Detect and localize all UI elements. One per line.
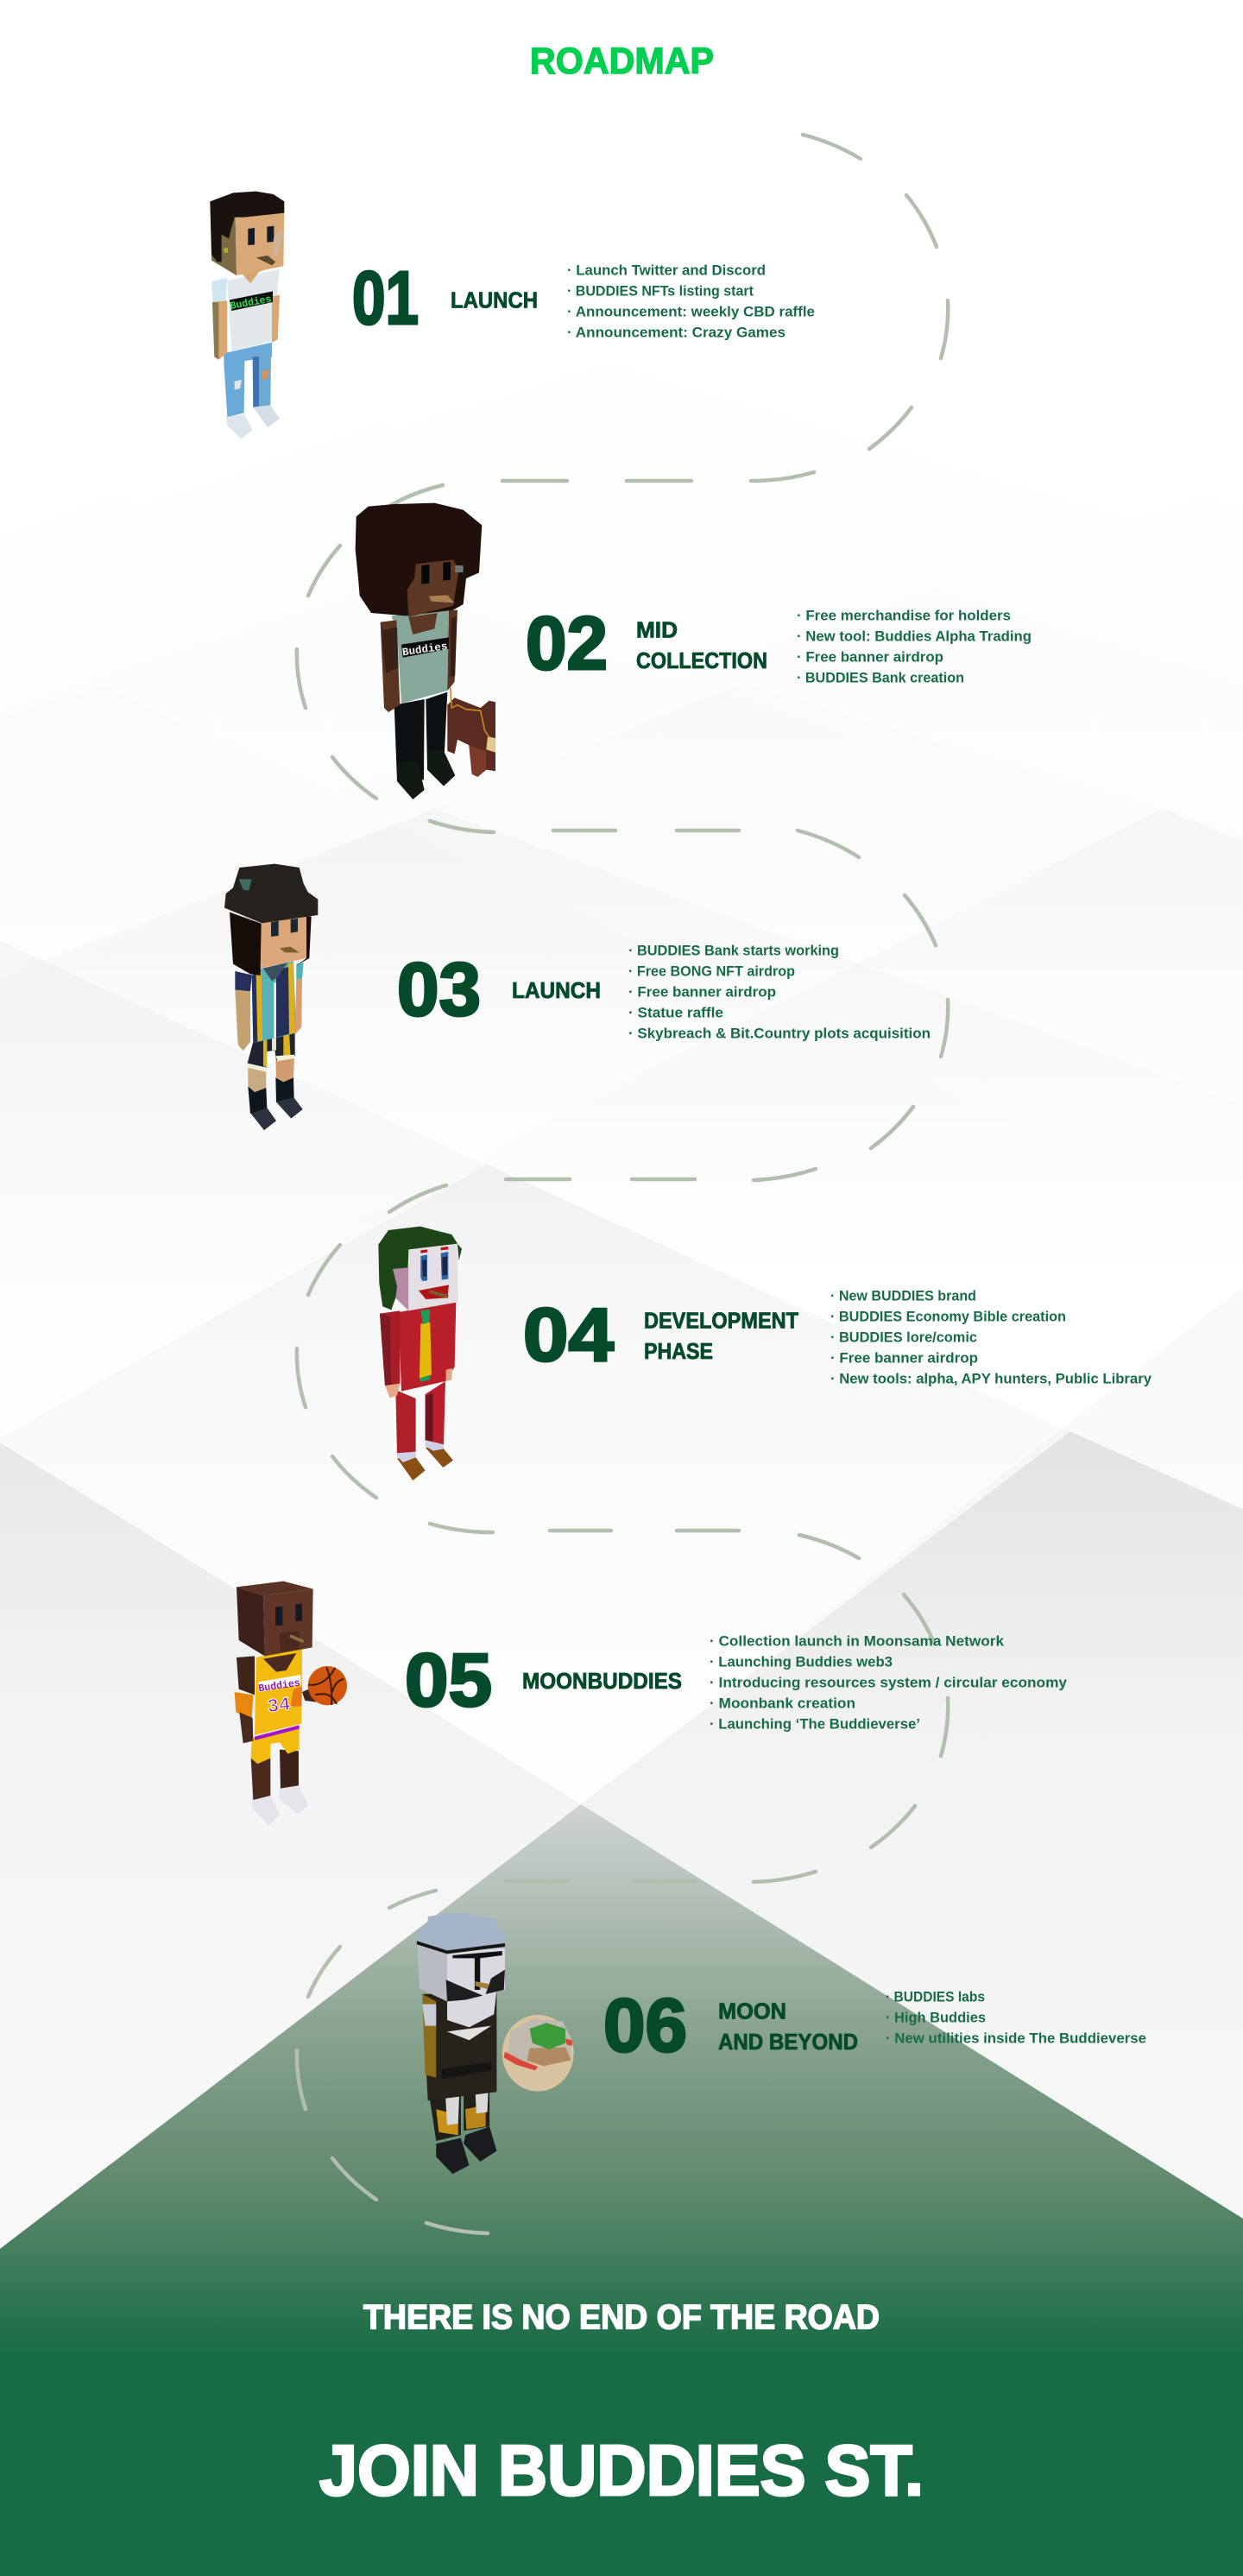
bullet list 06: · New utilities inside The Buddieverse <box>886 2030 1146 2047</box>
bullet list 05: · Launching Buddies web3 <box>710 1653 893 1670</box>
heading: moon and beyond <box>718 1998 858 2055</box>
title: ROADMAP <box>530 41 714 82</box>
bullet list 05: · Launching ‘The Buddieverse’ <box>710 1715 920 1732</box>
character 01: white tee and jeans: Buddies <box>230 294 273 313</box>
dashed road path <box>297 135 948 2233</box>
step 02 <box>526 602 1032 686</box>
bullet list 03: · BUDDIES Bank starts working <box>628 943 839 959</box>
heading: launch: LAUNCH <box>451 287 538 313</box>
bullet list 03: · Skybreach & Bit.Country plots acquisition <box>628 1026 931 1042</box>
heading: development phase <box>644 1307 798 1364</box>
bullet list 04: · BUDDIES Economy Bible creation <box>830 1308 1066 1324</box>
heading: moon and beyond: AND BEYOND <box>718 2029 858 2055</box>
number 03: 03 <box>397 948 481 1032</box>
character 02: afro, tank top and dog <box>356 503 495 799</box>
bullet list 06: · BUDDIES labs <box>886 1989 985 2005</box>
step 05 <box>405 1632 1068 1732</box>
bullet list 01: · Announcement: weekly CBD raffle <box>567 304 815 319</box>
bullet list 06: · High Buddies <box>886 2010 986 2026</box>
character 05: basketball jersey 34 <box>235 1582 347 1826</box>
footer call to action: JOIN BUDDIES ST. <box>319 2430 924 2510</box>
character 03: bucket hat and striped shirt <box>224 864 318 1130</box>
bullet list 05: · Introducing resources system / circular economy <box>710 1674 1068 1690</box>
bullet list 01: · Launch Twitter and Discord <box>567 262 766 278</box>
character 04: red suit and green hair <box>378 1227 462 1481</box>
bullet list 03: · Statue raffle <box>628 1005 723 1021</box>
bullet list 01 <box>567 262 815 340</box>
bullet list 03: · Free banner airdrop <box>628 984 776 1001</box>
bullet list 05: · Collection launch in Moonsama Network <box>710 1632 1005 1649</box>
bullet list 02: · New tool: Buddies Alpha Trading <box>797 628 1032 645</box>
bullet list 04: · BUDDIES lore/comic <box>830 1329 977 1345</box>
bullet list 04: · Free banner airdrop <box>830 1349 978 1366</box>
character 05: basketball jersey 34: Buddies <box>258 1677 301 1695</box>
bullet list 01: · Announcement: Crazy Games <box>567 325 786 340</box>
bullet list 02: · BUDDIES Bank creation <box>797 670 964 686</box>
bullet list 03: · Free BONG NFT airdrop <box>628 963 795 980</box>
step 06 <box>603 1984 1146 2068</box>
bullet list 04 <box>830 1287 1152 1386</box>
character 06: armored helmet with baby in pod <box>417 1912 574 2174</box>
bullet list 01: · BUDDIES NFTs listing start <box>567 283 754 299</box>
character 01: white tee and jeans <box>210 192 284 439</box>
bullet list 04: · New BUDDIES brand <box>830 1287 976 1304</box>
heading: mid collection <box>636 616 767 673</box>
bullet list 02: · Free merchandise for holders <box>797 608 1011 624</box>
number 05: 05 <box>405 1638 492 1722</box>
character 02: afro, tank top and dog: Buddies <box>401 640 448 659</box>
step 01 <box>352 256 815 340</box>
heading: mid collection: COLLECTION <box>636 647 767 673</box>
heading: moonbuddies: MOONBUDDIES <box>522 1668 682 1694</box>
number 02: 02 <box>526 602 608 685</box>
number 06: 06 <box>603 1984 687 2068</box>
heading: moon and beyond: MOON <box>718 1998 786 2024</box>
step 03 <box>397 943 931 1042</box>
bullet list 02 <box>797 608 1032 686</box>
bullet list 05 <box>710 1632 1068 1732</box>
bullet list 05: · Moonbank creation <box>710 1695 855 1711</box>
character 05: basketball jersey 34: 34 <box>266 1694 292 1718</box>
green ground triangle and footer band <box>0 1804 1243 2576</box>
number 01: 01 <box>352 256 419 340</box>
bullet list 06 <box>886 1989 1146 2047</box>
bullet list 03 <box>628 943 931 1042</box>
footer subheading: THERE IS NO END OF THE ROAD <box>363 2298 880 2336</box>
heading: development phase: PHASE <box>644 1338 713 1364</box>
heading: mid collection: MID <box>636 616 678 642</box>
number 04: 04 <box>523 1293 614 1377</box>
step 04 <box>523 1287 1152 1386</box>
heading: development phase: DEVELOPMENT <box>644 1307 798 1333</box>
heading: launch: LAUNCH <box>512 977 601 1003</box>
bullet list 04: · New tools: alpha, APY hunters, Public Library <box>830 1370 1152 1386</box>
bullet list 02: · Free banner airdrop <box>797 649 943 666</box>
